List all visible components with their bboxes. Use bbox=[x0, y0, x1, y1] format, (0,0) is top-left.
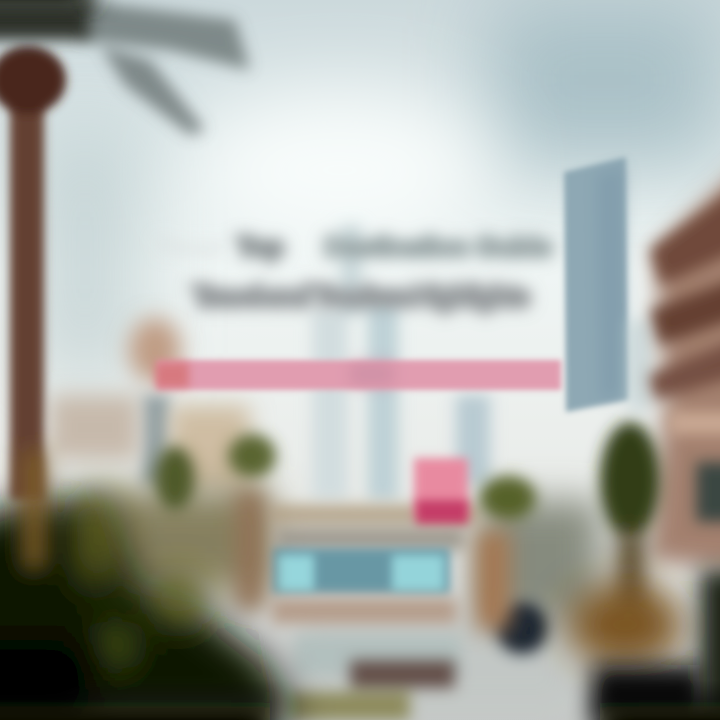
dark figure right of pool bbox=[496, 602, 548, 654]
blue glass tower bbox=[564, 157, 652, 412]
palm crown bbox=[0, 0, 250, 135]
tan terrace band bbox=[270, 505, 480, 550]
left low beige buildings bbox=[50, 318, 250, 490]
pink sign bbox=[414, 458, 468, 524]
palm trunk bbox=[10, 100, 46, 570]
pink banner bbox=[155, 360, 561, 390]
pool deck bbox=[272, 598, 460, 675]
small palms bbox=[155, 434, 536, 630]
pool water bbox=[272, 548, 450, 594]
headline text placeholder line 1 bbox=[154, 231, 552, 262]
loungers bbox=[290, 660, 455, 720]
headline text placeholder line 1: Destination Guide bbox=[324, 231, 552, 262]
right brown building bbox=[648, 150, 720, 570]
mid greenery and tan ground band bbox=[100, 490, 600, 720]
top edge palm shade bbox=[0, 0, 90, 24]
headline text placeholder line 2: Travel and Tourism Highlights bbox=[192, 280, 530, 313]
bottom edge foreground shade bbox=[0, 680, 720, 720]
foreground bush bbox=[0, 490, 300, 720]
right palm bbox=[567, 422, 720, 720]
background towers bbox=[142, 225, 490, 500]
headline text placeholder line 1: Your bbox=[154, 231, 226, 262]
headline text placeholder line 1: Top bbox=[236, 231, 284, 262]
